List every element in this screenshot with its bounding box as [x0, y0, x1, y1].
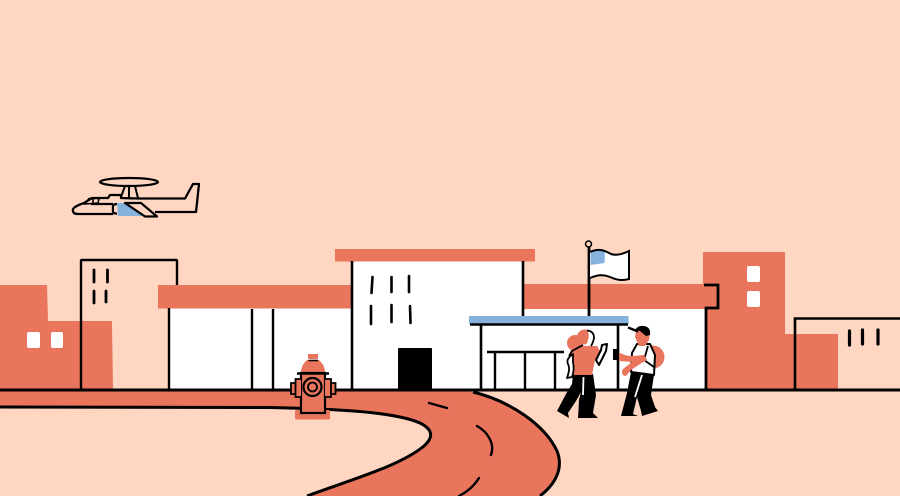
raised arm	[596, 344, 607, 365]
right school wing	[523, 284, 717, 390]
flag and flagpole	[586, 241, 629, 316]
shirt	[631, 344, 655, 375]
leg highlight	[635, 375, 642, 397]
person with backpack	[613, 326, 664, 416]
child limb	[567, 354, 574, 378]
entrance porch	[469, 316, 628, 390]
road	[0, 390, 559, 496]
child hair	[567, 335, 583, 351]
child shoulder line	[569, 345, 583, 356]
person carrying child	[557, 330, 607, 418]
phone	[613, 349, 619, 360]
ground line	[0, 388, 900, 392]
left school wing	[158, 285, 353, 390]
right coral tower	[703, 252, 838, 390]
left outlined tower	[81, 260, 177, 390]
arm	[617, 352, 647, 376]
backpack	[642, 346, 664, 368]
head and cap	[628, 326, 650, 346]
fire hydrant	[291, 354, 336, 420]
left coral building	[0, 285, 113, 390]
right outlined building	[795, 318, 900, 390]
leg highlight	[582, 377, 584, 395]
head	[577, 330, 594, 346]
shirt	[570, 346, 600, 375]
central school block	[335, 249, 535, 391]
legs	[621, 372, 658, 416]
helicopter	[73, 178, 199, 216]
backpack strap	[644, 346, 654, 367]
legs	[557, 374, 598, 418]
